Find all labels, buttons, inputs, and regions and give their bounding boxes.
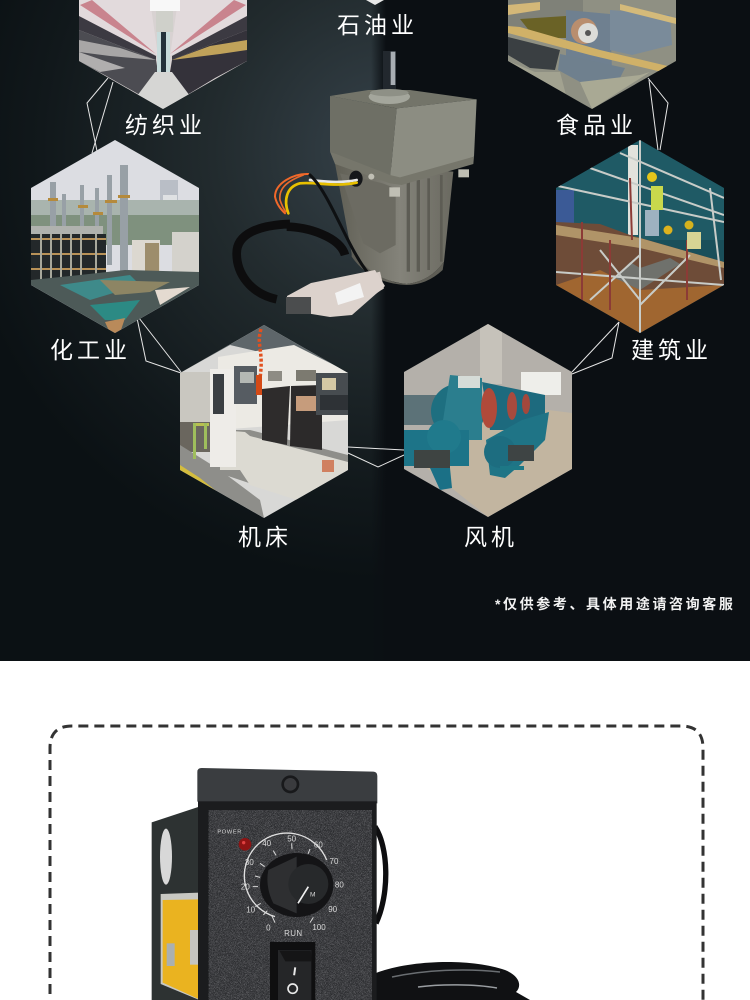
motor gearbox right face bbox=[390, 99, 477, 183]
controller front bbox=[198, 801, 377, 1000]
label: 食品业: 食品业 bbox=[556, 112, 637, 138]
motor wires bbox=[275, 174, 368, 273]
label: 纺织业: 纺织业 bbox=[125, 112, 206, 138]
motor plug connector bbox=[315, 272, 384, 310]
photo: industrial fan hexagon bbox=[404, 324, 572, 519]
dial scale: 60 bbox=[314, 840, 323, 849]
dial scale: 70 bbox=[330, 857, 339, 866]
dial scale: 30 bbox=[245, 858, 254, 867]
dial scale: 20 bbox=[241, 882, 250, 891]
dark application panel bbox=[0, 0, 750, 661]
motor gearbox top face bbox=[330, 90, 477, 108]
label: 化工业: 化工业 bbox=[50, 337, 131, 363]
photo: oil hexagon tip bbox=[366, 0, 384, 5]
power LED: POWER bbox=[217, 829, 242, 835]
label: 机床: 机床 bbox=[238, 524, 292, 550]
product photo: gear motor bbox=[237, 51, 477, 310]
motor gearbox left face bbox=[330, 96, 397, 180]
connector lines bbox=[87, 78, 668, 467]
motor flange bbox=[369, 89, 410, 104]
motor black sleeve cable bbox=[237, 224, 345, 299]
dial scale: 40 bbox=[262, 839, 272, 848]
controller textured panel bbox=[209, 810, 372, 1000]
controller cable bbox=[375, 827, 386, 923]
controller top plate bbox=[197, 768, 377, 803]
dial scale: 80 bbox=[335, 881, 344, 890]
power LED bbox=[217, 829, 251, 851]
dial scale: 0 bbox=[266, 924, 271, 933]
dial scale bbox=[241, 833, 344, 938]
photo: textile hexagon bbox=[79, 0, 247, 110]
photo: construction hexagon bbox=[556, 140, 724, 335]
dial scale: RUN bbox=[284, 929, 302, 938]
cable coil bbox=[376, 962, 530, 1000]
label: 风机: 风机 bbox=[464, 524, 518, 550]
photo: food hexagon bbox=[508, 0, 676, 110]
mounting hole bbox=[281, 775, 299, 793]
motor cable grommet bbox=[349, 171, 363, 187]
footnote: *仅供参考、具体用途请咨询客服 bbox=[495, 596, 735, 612]
motor lower body bbox=[335, 163, 453, 285]
control knob: M bbox=[310, 892, 316, 899]
dashed frame bbox=[50, 726, 703, 1000]
dial scale: 100 bbox=[312, 923, 326, 932]
rocker switch bbox=[270, 942, 315, 1000]
label: 建筑业: 建筑业 bbox=[631, 337, 712, 363]
dial scale: 10 bbox=[246, 906, 256, 915]
photo: chemical plant hexagon bbox=[31, 140, 199, 335]
dial scale: 50 bbox=[287, 834, 297, 843]
photo: machine tool hexagon bbox=[180, 325, 348, 520]
plug connector body bbox=[286, 270, 385, 317]
control knob bbox=[260, 853, 333, 917]
product photo: speed controller bbox=[152, 768, 386, 1000]
motor shaft bbox=[383, 51, 396, 90]
controller side bbox=[152, 807, 199, 1000]
dial scale: 90 bbox=[328, 905, 338, 914]
motor screws bbox=[368, 169, 469, 197]
label: 石油业: 石油业 bbox=[337, 12, 418, 38]
